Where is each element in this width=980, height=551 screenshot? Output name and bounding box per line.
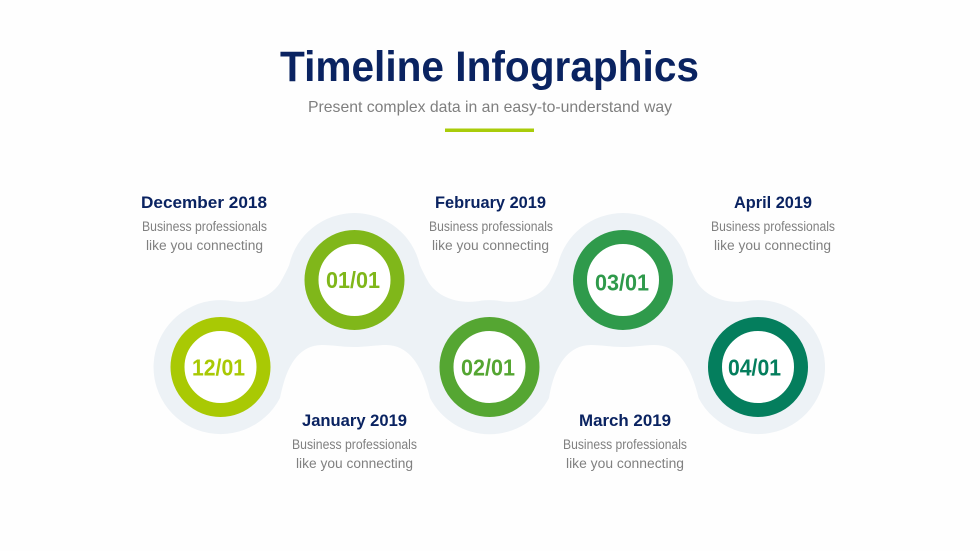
subtitle: Present complex data in an easy-to-understand way xyxy=(308,99,672,116)
text block: March 2019 xyxy=(563,412,687,471)
milestone 01/01: 01/01 xyxy=(326,267,380,293)
text block: April 2019: Business professionals xyxy=(711,219,835,234)
text block: December 2018: like you connecting xyxy=(146,238,263,253)
text block: April 2019: like you connecting xyxy=(714,238,831,253)
text block: March 2019: Business professionals xyxy=(563,437,687,452)
text block: February 2019: Business professionals xyxy=(429,219,553,234)
milestone 12/01: 12/01 xyxy=(192,354,245,380)
milestone 04/01 xyxy=(715,324,801,410)
text block: February 2019: like you connecting xyxy=(432,238,549,253)
text block: January 2019: Business professionals xyxy=(292,437,417,452)
text block: December 2018: December 2018 xyxy=(141,194,267,212)
text block: January 2019: January 2019 xyxy=(302,412,407,430)
milestone 01/01 xyxy=(312,237,398,323)
title: Timeline Infographics xyxy=(280,43,699,91)
text block: January 2019 xyxy=(292,412,417,471)
text block: January 2019: like you connecting xyxy=(296,456,413,471)
text block: March 2019: like you connecting xyxy=(566,456,684,471)
text block: February 2019: February 2019 xyxy=(435,194,546,212)
text block: December 2018 xyxy=(141,194,267,253)
milestone 02/01 xyxy=(446,324,532,410)
text block: December 2018: Business professionals xyxy=(142,219,267,234)
text block: April 2019: April 2019 xyxy=(734,194,812,212)
milestone 03/01: 03/01 xyxy=(595,270,649,296)
milestone 04/01: 04/01 xyxy=(728,354,781,380)
milestone 02/01: 02/01 xyxy=(461,354,515,380)
title underline xyxy=(445,128,534,132)
text block: March 2019: March 2019 xyxy=(579,412,671,430)
milestone 03/01 xyxy=(580,237,666,323)
timeline halo band xyxy=(154,213,825,434)
text block: April 2019 xyxy=(711,194,835,253)
text block: February 2019 xyxy=(429,194,553,253)
milestone 12/01 xyxy=(178,324,264,410)
